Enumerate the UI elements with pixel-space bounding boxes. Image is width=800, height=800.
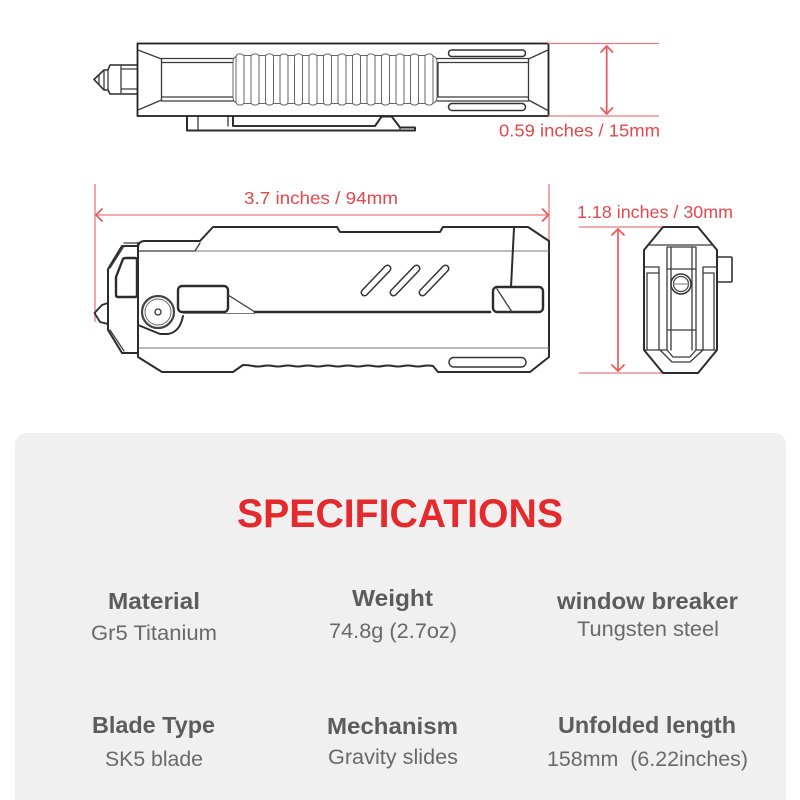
dimension: length: [95, 184, 549, 322]
breaker tip, side view: [94, 303, 108, 324]
label: thickness value: 0.59 inches / 15mm: [499, 120, 660, 140]
spec: blade type: [92, 712, 215, 771]
spec: material: Material: [108, 588, 200, 614]
spec: weight: [329, 585, 457, 643]
side stub: [717, 257, 732, 282]
spec: unfolded length: Unfolded length: [558, 712, 736, 738]
spec: window breaker: Tungsten steel: [577, 618, 719, 641]
spec: weight: 74.8g (2.7oz): [329, 620, 457, 643]
spec: material: [91, 588, 217, 645]
spec: mechanism: [327, 713, 458, 769]
three diagonal vents: [364, 268, 446, 292]
body outline: [138, 227, 549, 372]
pivot circle: [671, 274, 691, 294]
left side block: [644, 267, 659, 350]
right window: [493, 228, 543, 312]
panel: top view of tool: [94, 44, 548, 130]
panel: side view of tool: [94, 227, 549, 372]
bottom groove: [449, 358, 526, 367]
inner lines: [650, 244, 712, 246]
slide track: [255, 311, 490, 313]
end outline: [644, 227, 717, 373]
right bevel and recess: [437, 50, 548, 110]
body lines: [139, 251, 549, 348]
spec: unfolded length: [547, 712, 748, 771]
clip on underside: [187, 116, 415, 130]
window breaker tip, top view: [94, 65, 137, 94]
breaker window: [116, 258, 137, 297]
top grooves: [448, 50, 526, 110]
body outline: [138, 44, 548, 116]
release ramp: [228, 295, 255, 312]
spec: unfolded length: 158mm (6.22inches): [547, 748, 748, 771]
central column: [644, 247, 717, 362]
spec: blade type: SK5 blade: [105, 748, 203, 771]
release window: [178, 286, 228, 312]
left bevel and recess: [138, 50, 234, 110]
label: length value: 3.7 inches / 94mm: [244, 188, 398, 208]
spec: blade type: Blade Type: [92, 712, 215, 738]
spec: weight: Weight: [352, 585, 433, 611]
spec: mechanism: Mechanism: [327, 713, 458, 739]
left end cap: [108, 246, 138, 353]
panel: end view of tool: [644, 227, 732, 373]
screw: [138, 296, 183, 334]
right side block: [703, 267, 717, 350]
spec: window breaker: [556, 588, 738, 641]
grip ribs: [233, 54, 437, 105]
label: width value: 1.18 inches / 30mm: [577, 202, 733, 222]
heading: SPECIFICATIONS: [237, 492, 563, 536]
dimension: width: [577, 202, 733, 373]
spec: material: Gr5 Titanium: [91, 622, 217, 645]
panel: specifications: [15, 433, 786, 800]
spec: window breaker: window breaker: [556, 588, 738, 614]
dimension: thickness: [499, 44, 660, 140]
spec: mechanism: Gravity slides: [328, 746, 458, 769]
